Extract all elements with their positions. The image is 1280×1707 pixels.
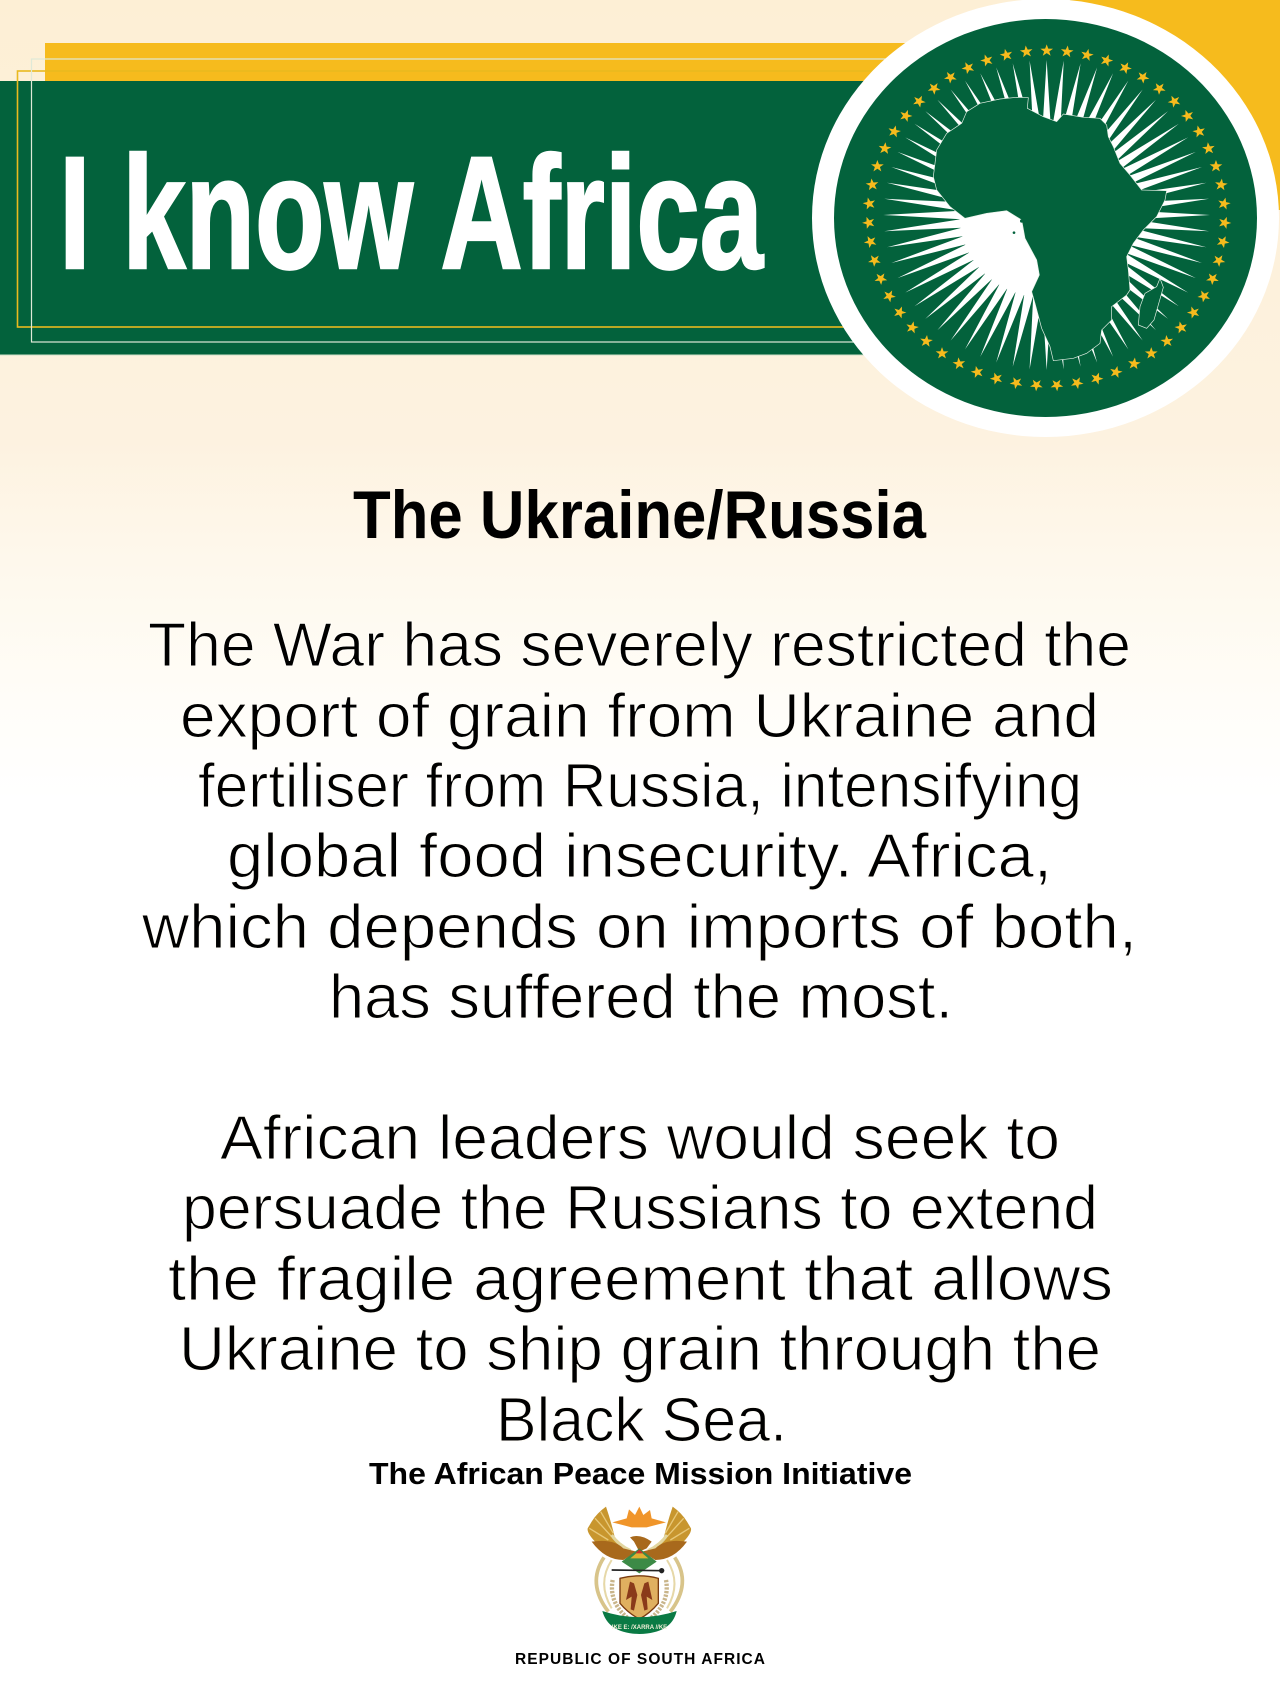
yellow band [45, 43, 945, 81]
paragraph 1: fertiliser from Russia, intensifying [198, 752, 1082, 821]
paragraph 1 [141, 611, 1137, 1032]
star ring [857, 39, 1237, 397]
paragraph 1: export of grain from Ukraine and [180, 682, 1099, 751]
title: I know Africa [59, 123, 764, 302]
Madagascar [1138, 278, 1163, 328]
yellow corner block [1070, 0, 1280, 210]
icon: South African coat of arms [588, 1507, 691, 1634]
paragraph 2: Ukraine to ship grain through the [179, 1315, 1101, 1384]
paragraph 2: persuade the Russians to extend [182, 1174, 1098, 1243]
paragraph 2: Black Sea. [496, 1386, 787, 1455]
heading: The Ukraine/Russia [353, 477, 927, 553]
sun rays [883, 60, 1210, 370]
paragraph 1: has suffered the most. [329, 963, 953, 1032]
paragraph 1: global food insecurity. Africa, [227, 822, 1052, 891]
paragraph 1: which depends on imports of both, [141, 893, 1137, 962]
green band [0, 81, 940, 355]
paragraph 2 [168, 1104, 1113, 1455]
emblem: African Union [812, 0, 1279, 437]
paragraph 2: African leaders would seek to [220, 1104, 1060, 1173]
paragraph 1: The War has severely restricted the [148, 611, 1131, 680]
banner [0, 0, 1280, 356]
icon: South African coat of arms: !KE E: /XARRA //KE [612, 1625, 667, 1631]
footer line: The African Peace Mission Initiative [369, 1456, 912, 1491]
caption: REPUBLIC OF SOUTH AFRICA [515, 1651, 765, 1668]
map of Africa [933, 97, 1167, 361]
paragraph 2: the fragile agreement that allows [168, 1245, 1113, 1314]
